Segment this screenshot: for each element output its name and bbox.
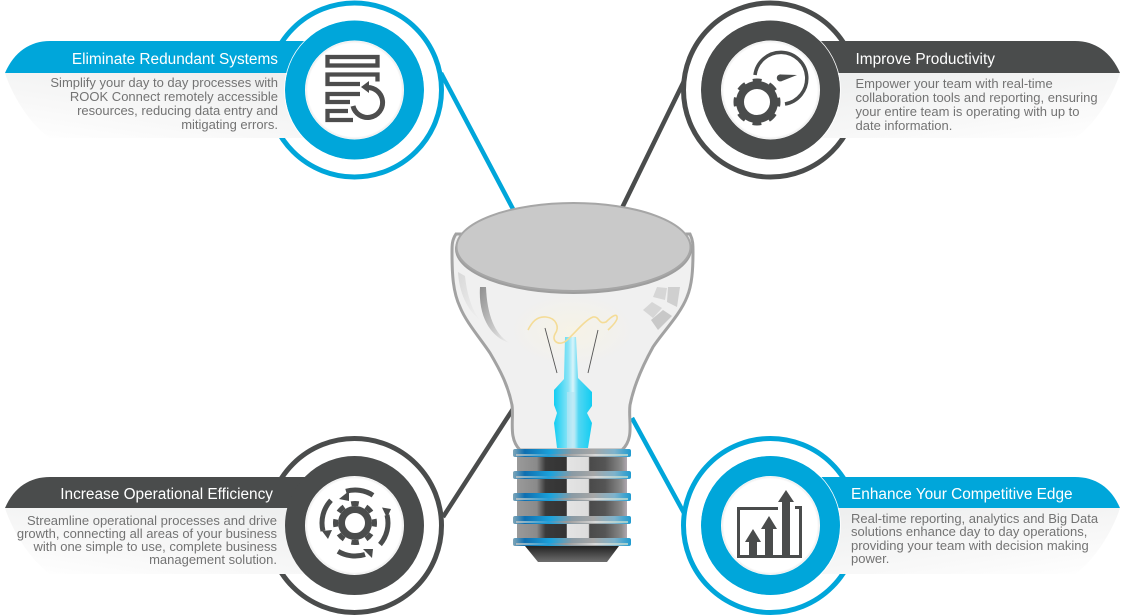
description backdrop [5, 508, 330, 574]
description: growth, connecting all areas of your business [17, 526, 277, 541]
description: ROOK Connect remotely accessible [70, 89, 278, 104]
description: Simplify your day to day processes with [50, 75, 278, 90]
glass stem [554, 337, 592, 448]
heading: Improve Productivity [856, 51, 995, 68]
thick ring [295, 30, 414, 150]
description: collaboration tools and reporting, ensuring [856, 90, 1098, 105]
icon: gear with cycle arrows [322, 490, 391, 558]
thick ring [295, 466, 414, 585]
glass reflection: window [643, 287, 680, 330]
thick ring [711, 30, 830, 150]
description: power. [851, 551, 889, 566]
description: Real-time reporting, analytics and Big Data [851, 511, 1099, 526]
heading: Increase Operational Efficiency [60, 486, 273, 503]
connector: bottom left [443, 409, 513, 517]
heading banner [795, 477, 1120, 508]
description: management solution. [149, 552, 277, 567]
description backdrop [795, 73, 1120, 138]
panel: enhance your competitive edge [684, 438, 1120, 612]
bulb top rim [455, 204, 692, 294]
heading banner [5, 477, 330, 508]
outer ring [684, 3, 858, 177]
connector: top right [622, 77, 686, 208]
screw tip [525, 546, 619, 562]
description: Empower your team with real-time [856, 76, 1053, 91]
description: resources, reducing data entry and [77, 103, 278, 118]
bulb top [456, 203, 690, 291]
inner disc [306, 476, 404, 574]
icon: document refresh [328, 57, 383, 120]
glass reflection: left [458, 272, 510, 343]
outer ring [268, 438, 442, 612]
heading: Enhance Your Competitive Edge [851, 486, 1073, 503]
connector: bottom right [632, 418, 684, 513]
screw bands [513, 449, 631, 546]
icon: rising arrows chart [738, 490, 800, 556]
description: solutions enhance day to day operations, [851, 524, 1087, 539]
heading: Eliminate Redundant Systems [72, 51, 278, 68]
description backdrop [795, 508, 1120, 574]
connector: top left [441, 73, 513, 209]
inner disc [306, 41, 404, 139]
inner disc [722, 41, 820, 139]
thick ring [711, 466, 830, 585]
light bulb [452, 203, 693, 562]
ring hairline [700, 20, 840, 160]
bulb glass [452, 234, 693, 450]
icon: gear and gauge [732, 52, 807, 127]
description: date information. [856, 118, 952, 133]
description: providing your team with decision making [851, 538, 1089, 553]
panel: improve productivity [684, 3, 1120, 177]
description: with one simple to use, complete business [32, 539, 277, 554]
filament supports [545, 328, 598, 373]
outer ring [684, 438, 858, 612]
description backdrop [5, 73, 330, 138]
inner disc [722, 476, 820, 574]
panel: eliminate redundant systems [5, 3, 442, 177]
panel: increase operational efficiency [5, 438, 442, 612]
ring hairline [700, 456, 840, 596]
outer ring [268, 3, 442, 177]
filament glow [510, 294, 634, 366]
screw threads [517, 450, 627, 546]
filament [528, 315, 617, 343]
description: your entire team is operating with up to [856, 104, 1080, 119]
ring hairline [284, 20, 424, 160]
heading banner [5, 41, 330, 73]
heading banner [795, 41, 1120, 73]
description: Streamline operational processes and drive [27, 513, 277, 528]
description: mitigating errors. [181, 117, 278, 132]
